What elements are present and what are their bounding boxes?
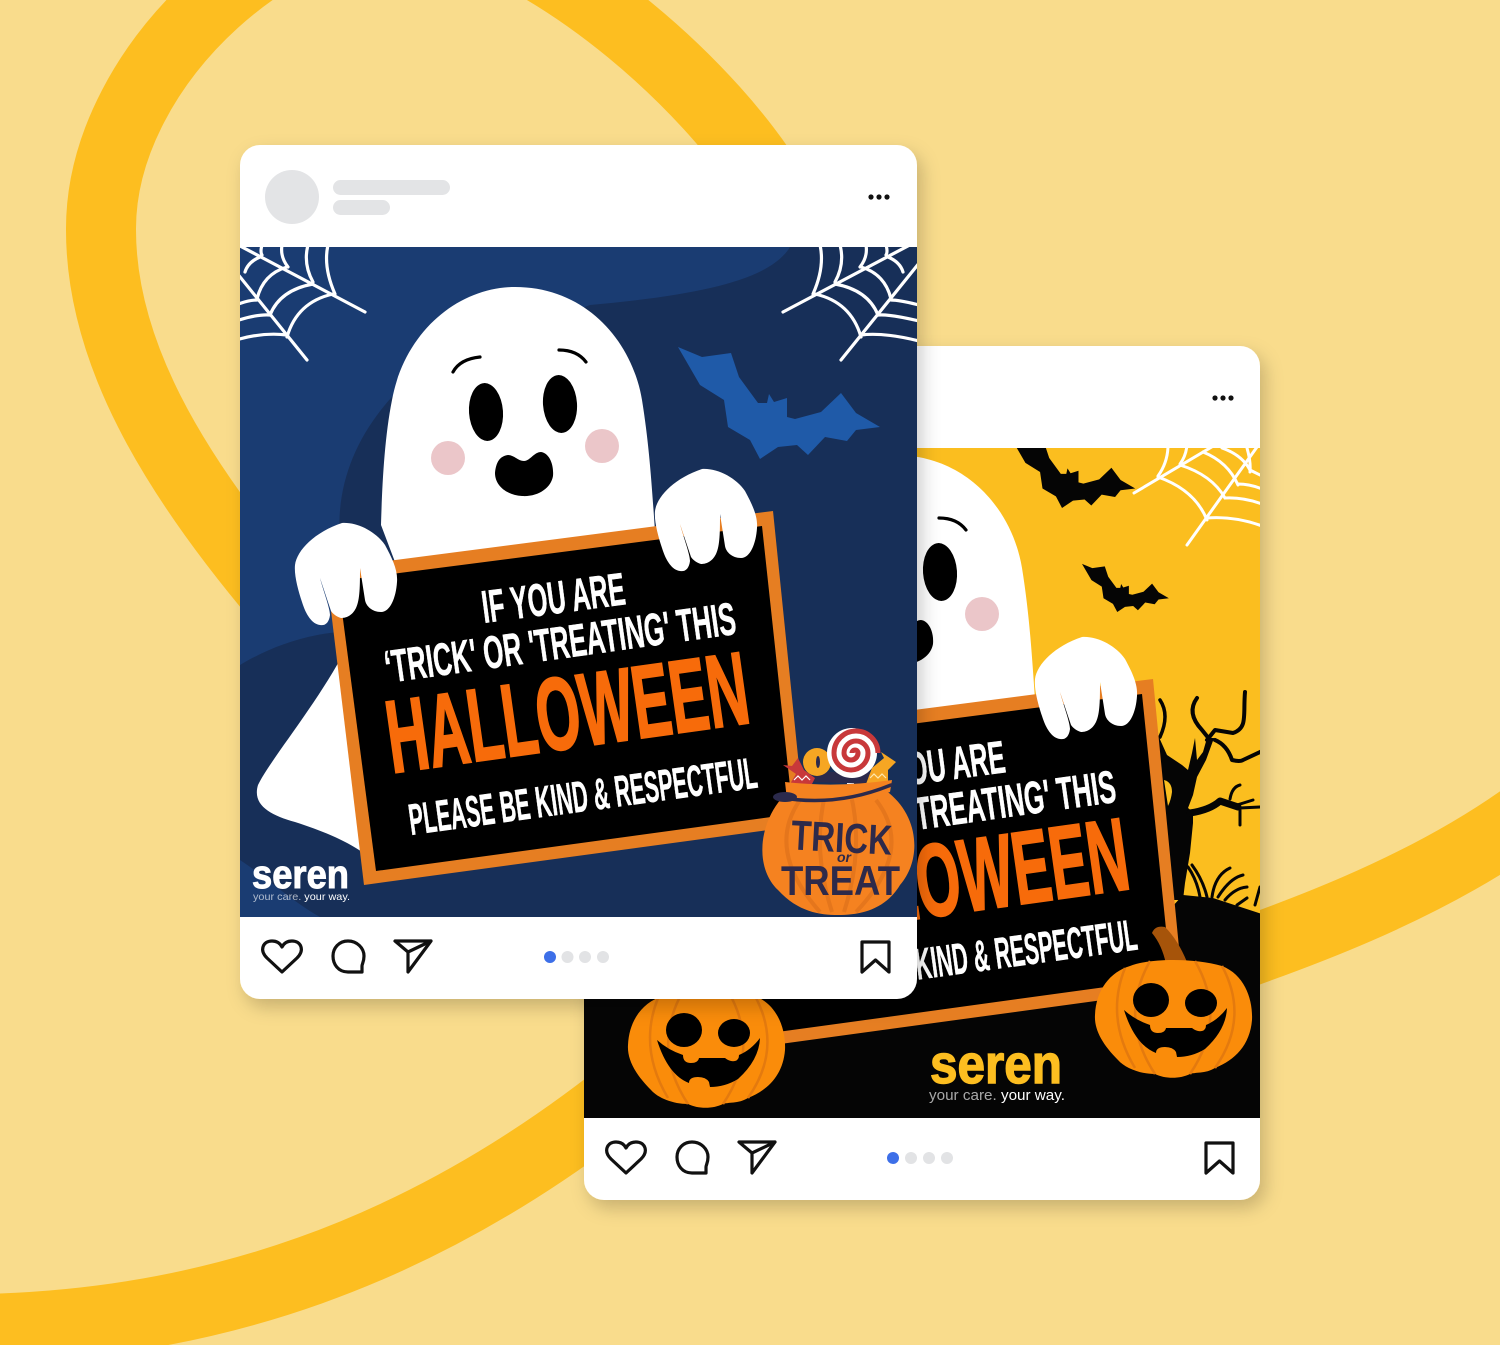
bucket lettering: TREAT <box>781 857 900 904</box>
bucket body <box>762 790 914 915</box>
spider web <box>1134 440 1262 545</box>
sign text: IF YOU ARE <box>479 563 628 633</box>
card: blue Halloween post <box>225 145 923 999</box>
bucket lettering <box>781 820 900 895</box>
menu dots <box>868 194 890 200</box>
avatar placeholder <box>265 170 319 224</box>
logo: seren yellow: your care. your way. <box>929 1087 1065 1104</box>
ghost body <box>917 456 1035 710</box>
post artwork: yellow <box>584 440 1262 1118</box>
spider web right <box>783 238 923 360</box>
heart icon <box>263 941 301 972</box>
logo: seren yellow: seren <box>930 1033 1062 1095</box>
sign text: HALLOWEEN <box>379 630 756 795</box>
sign text: IF YOU ARE <box>859 731 1008 801</box>
pumpkin right <box>1095 927 1252 1078</box>
sign text: ‘TRICK' OR 'TREATING' THIS <box>761 760 1119 861</box>
card: yellow Halloween post <box>584 346 1262 1200</box>
bookmark icon <box>1206 1143 1233 1173</box>
ghost face <box>431 350 619 496</box>
pumpkin left <box>628 990 785 1108</box>
comment icon <box>677 1142 708 1173</box>
ghost holding sign <box>783 456 1179 1044</box>
bat large <box>1016 448 1136 508</box>
action icons <box>263 941 889 972</box>
sign text <box>379 563 760 845</box>
sweets <box>783 728 896 784</box>
spider web left <box>240 247 367 362</box>
bat <box>678 347 880 459</box>
ghost body <box>381 287 655 560</box>
ghost tail <box>256 664 360 851</box>
dark wave <box>240 247 917 917</box>
grass <box>1188 865 1260 905</box>
bookmark icon <box>862 942 889 972</box>
ghost hands <box>675 637 1137 793</box>
bucket lettering: or <box>837 849 853 865</box>
logo: seren white <box>252 866 350 902</box>
ghost face <box>917 516 999 662</box>
send icon <box>395 941 431 972</box>
logo: seren white: your care. your way. <box>253 891 350 903</box>
carousel dots <box>544 951 609 963</box>
sign board <box>783 679 1179 1044</box>
ghost hands <box>295 469 757 625</box>
bat small <box>1082 564 1169 612</box>
post artwork: blue <box>225 238 923 917</box>
action icons <box>607 1142 1233 1173</box>
bucket handle <box>778 785 891 801</box>
trick or treat bucket <box>762 728 914 915</box>
post artwork: blue: PLEASE BE KIND & RESPECTFUL <box>406 749 760 845</box>
ghost tail <box>637 818 760 1020</box>
ground <box>584 895 1262 1118</box>
name placeholders <box>333 180 450 215</box>
heart icon <box>607 1142 645 1173</box>
ghost holding sign: PLEASE BE KIND & RESPECTFUL <box>786 911 1140 1007</box>
comment icon <box>333 941 364 972</box>
bucket lettering: TRICK <box>790 811 893 864</box>
dead tree <box>1150 692 1260 905</box>
sign text: ‘TRICK' OR 'TREATING' THIS <box>381 592 739 693</box>
menu dots <box>1212 395 1234 401</box>
sign board <box>326 511 805 885</box>
logo: seren yellow <box>929 1052 1064 1103</box>
carousel dots <box>887 1152 953 1164</box>
sign text: HALLOWEEN <box>759 796 1136 961</box>
send icon <box>739 1142 775 1173</box>
logo: seren white: seren <box>252 853 349 897</box>
sign text <box>917 740 1138 980</box>
